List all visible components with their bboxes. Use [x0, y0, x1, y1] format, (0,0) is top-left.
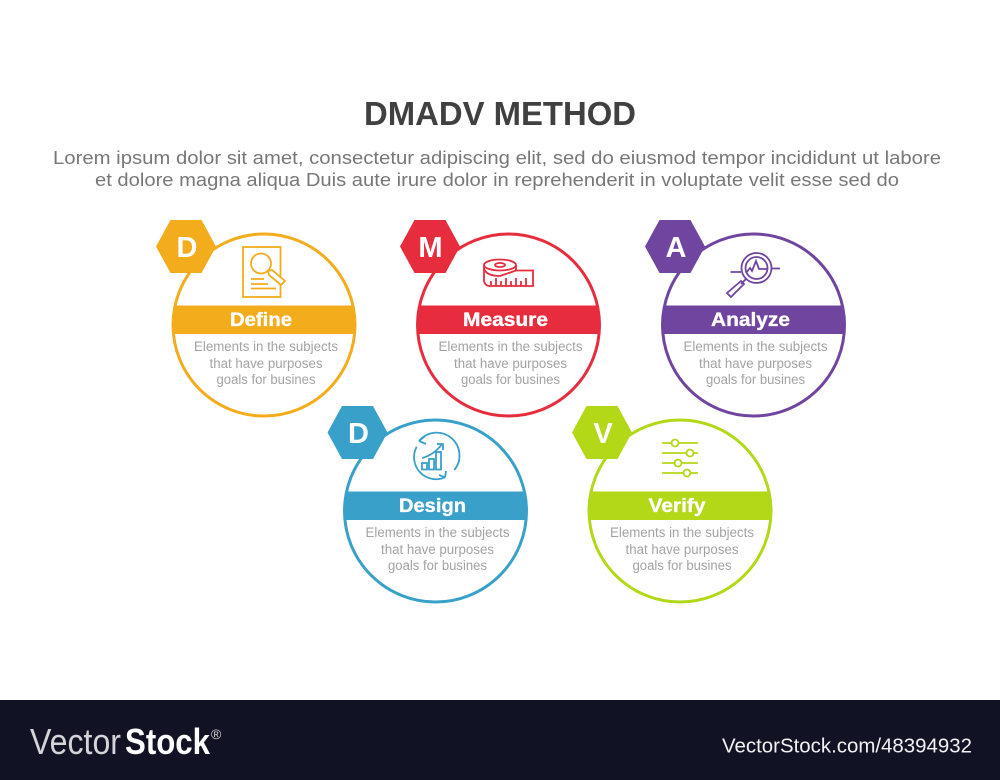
- subtitle text: Lorem ipsum dolor sit amet, consectetur adipiscing elit, sed do eiusmod tempor incididunt ut labore: [53, 148, 941, 168]
- hexagon badge: M: M: [418, 232, 443, 264]
- description: measure: [438, 339, 583, 387]
- label: measure: Measure: [463, 310, 548, 331]
- footer url: VectorStock.com/48394932: [722, 736, 972, 758]
- description: analyze: that have purposes: [699, 356, 812, 371]
- description: verify: Elements in the subjects: [610, 525, 754, 540]
- description: design: that have purposes: [381, 542, 494, 557]
- subtitle text: [53, 148, 941, 190]
- description: analyze: [684, 339, 828, 387]
- description: verify: that have purposes: [626, 542, 739, 557]
- description: verify: [610, 525, 754, 573]
- hexagon badge: D: D: [348, 418, 369, 450]
- panel: design: [328, 406, 530, 602]
- hexagon badge: D: D: [177, 232, 197, 264]
- description: measure: Elements in the subjects: [438, 339, 583, 354]
- footer logo: [30, 721, 211, 762]
- hexagon badge: A: [645, 220, 705, 273]
- footer logo: Vector: [30, 721, 121, 762]
- label: design: Design: [399, 496, 466, 517]
- label band: define: [169, 306, 359, 334]
- description: define: Elements in the subjects: [194, 339, 338, 354]
- label: verify: Verify: [648, 496, 706, 517]
- icon: magnifier with signal: [727, 253, 780, 297]
- description: design: goals for busines: [388, 558, 487, 573]
- hexagon badge: V: [572, 406, 632, 459]
- description: define: [194, 339, 338, 387]
- panel: verify: [572, 406, 775, 602]
- label band: design: [340, 492, 530, 520]
- icon: measuring tape: [484, 260, 533, 286]
- description: define: that have purposes: [210, 356, 323, 371]
- icon: chart with cycle arrows: [414, 433, 459, 479]
- hexagon badge: V: V: [593, 418, 613, 450]
- footer logo: Stock: [125, 721, 211, 762]
- panel: define: [156, 220, 359, 416]
- hexagon badge: M: [400, 220, 460, 273]
- label band: analyze: [658, 306, 848, 334]
- icon: sliders: [662, 440, 698, 476]
- label band: measure: [414, 306, 604, 334]
- hexagon badge: A: A: [666, 232, 687, 264]
- panel: analyze: [645, 220, 848, 416]
- hexagon badge: D: [156, 220, 216, 273]
- description: define: goals for busines: [216, 372, 316, 387]
- description: design: Elements in the subjects: [366, 525, 510, 540]
- label: define: Define: [230, 310, 292, 331]
- description: measure: that have purposes: [454, 356, 567, 371]
- label band: verify: [585, 492, 775, 520]
- description: analyze: goals for busines: [706, 372, 805, 387]
- hexagon badge: D: [328, 406, 388, 459]
- description: verify: goals for busines: [632, 558, 732, 573]
- icon: document with magnifier: [243, 247, 285, 297]
- registered mark: ®: [211, 726, 222, 742]
- description: measure: goals for busines: [461, 372, 560, 387]
- subtitle text: et dolore magna aliqua Duis aute irure dolor in reprehenderit in voluptate velit esse sed do: [95, 170, 899, 190]
- title: DMADV METHOD: [364, 95, 636, 132]
- footer bar: [0, 700, 1000, 780]
- description: design: [366, 525, 510, 573]
- label: analyze: Analyze: [711, 310, 790, 331]
- description: analyze: Elements in the subjects: [684, 339, 828, 354]
- panel: measure: [400, 220, 604, 416]
